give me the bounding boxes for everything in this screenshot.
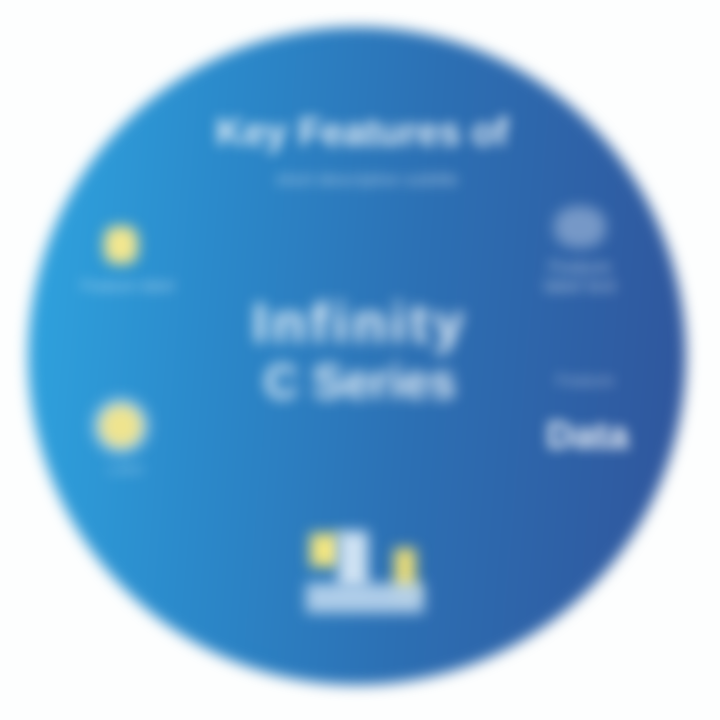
bottom chart: white middle block (338, 531, 368, 589)
center title: Infinity (252, 291, 468, 354)
label: top right: label text (544, 276, 616, 296)
icon: sun lower left (100, 405, 142, 447)
label: top right: Feature (549, 257, 611, 277)
icon: sun top left (104, 226, 138, 264)
heading: Key Features of (216, 111, 508, 154)
bottom chart: yellow right block (394, 548, 416, 596)
center title: C Series (264, 356, 456, 409)
label: top right (540, 256, 620, 298)
label: right value: Data (546, 415, 629, 457)
icon: bottom chart (296, 520, 434, 623)
label: right upper: Feature (556, 371, 614, 390)
icon: top right (554, 206, 606, 248)
bottom chart: base (306, 583, 424, 613)
label: top left: Feature label (81, 278, 174, 295)
bottom chart: yellow left block (310, 533, 340, 567)
label: lower left: Label (107, 461, 143, 478)
subheading: short descriptive subtitle (276, 170, 458, 189)
center title (244, 291, 472, 409)
